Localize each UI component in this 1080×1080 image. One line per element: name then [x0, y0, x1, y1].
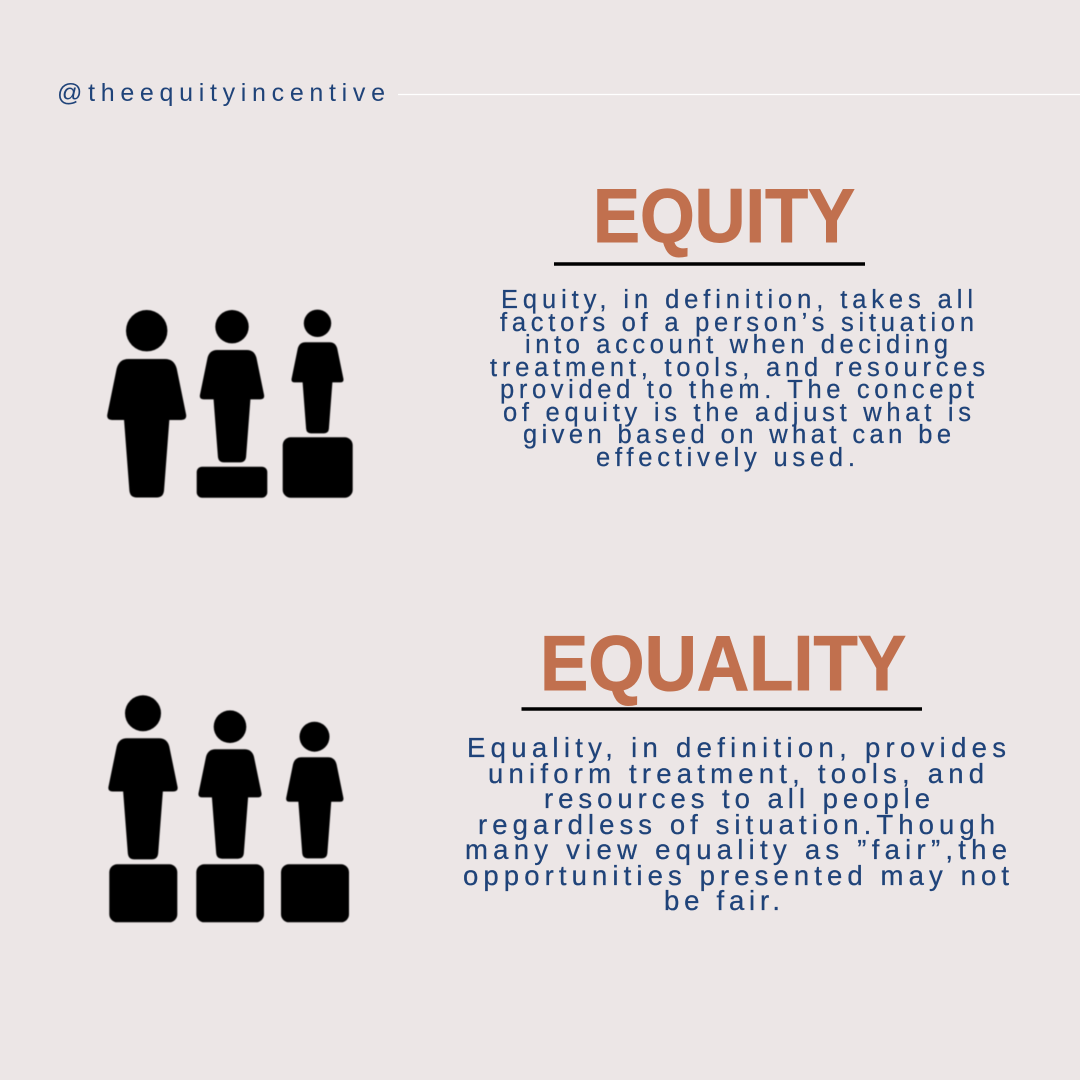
- text block: equality definition: [463, 732, 1009, 916]
- heading: equity: EQUITY: [593, 174, 855, 259]
- text block: equity definition: given based on what can be: [523, 421, 951, 449]
- social handle: @theequityincentive: [57, 79, 385, 107]
- text block: equality definition: be fair.: [664, 885, 780, 916]
- text block: equity definition: factors of a person’s situation: [500, 309, 974, 337]
- text block: equity definition: of equity is the adjust what is: [503, 399, 971, 427]
- panel: equality: [108, 619, 1009, 922]
- text block: equity definition: effectively used.: [596, 444, 855, 472]
- text block: equity definition: into account when deciding: [525, 331, 948, 359]
- icon: three people on equal blocks: [108, 695, 349, 922]
- heading: equality: EQUALITY: [540, 619, 906, 707]
- figure: tall person, no block: [107, 310, 186, 498]
- figure: tall person on block: [108, 695, 178, 922]
- text block: equality definition: uniform treatment, tools, and: [488, 758, 984, 789]
- text block: equity definition: treatment, tools, and resources: [490, 354, 985, 382]
- figure: middle person on low block: [197, 310, 267, 498]
- text block: equality definition: opportunities presented may not: [463, 860, 1009, 891]
- figure: middle person on block: [196, 710, 264, 922]
- text block: equity definition: provided to them. The concept: [500, 376, 974, 404]
- text block: equality definition: many view equality as ”fair”,the: [465, 834, 1007, 865]
- figure: short person on block: [281, 722, 349, 922]
- text block: equality definition: resources to all people: [544, 783, 930, 814]
- text block: equity definition: Equity, in definition, takes all: [501, 286, 973, 314]
- text block: equity definition: [490, 286, 985, 472]
- icon: three people on unequal blocks: [107, 310, 353, 498]
- text block: equality definition: regardless of situation.Though: [478, 809, 995, 840]
- text block: equality definition: Equality, in definition, provides: [467, 732, 1006, 763]
- figure: short person on high block: [283, 310, 353, 498]
- panel: equity: [107, 174, 985, 498]
